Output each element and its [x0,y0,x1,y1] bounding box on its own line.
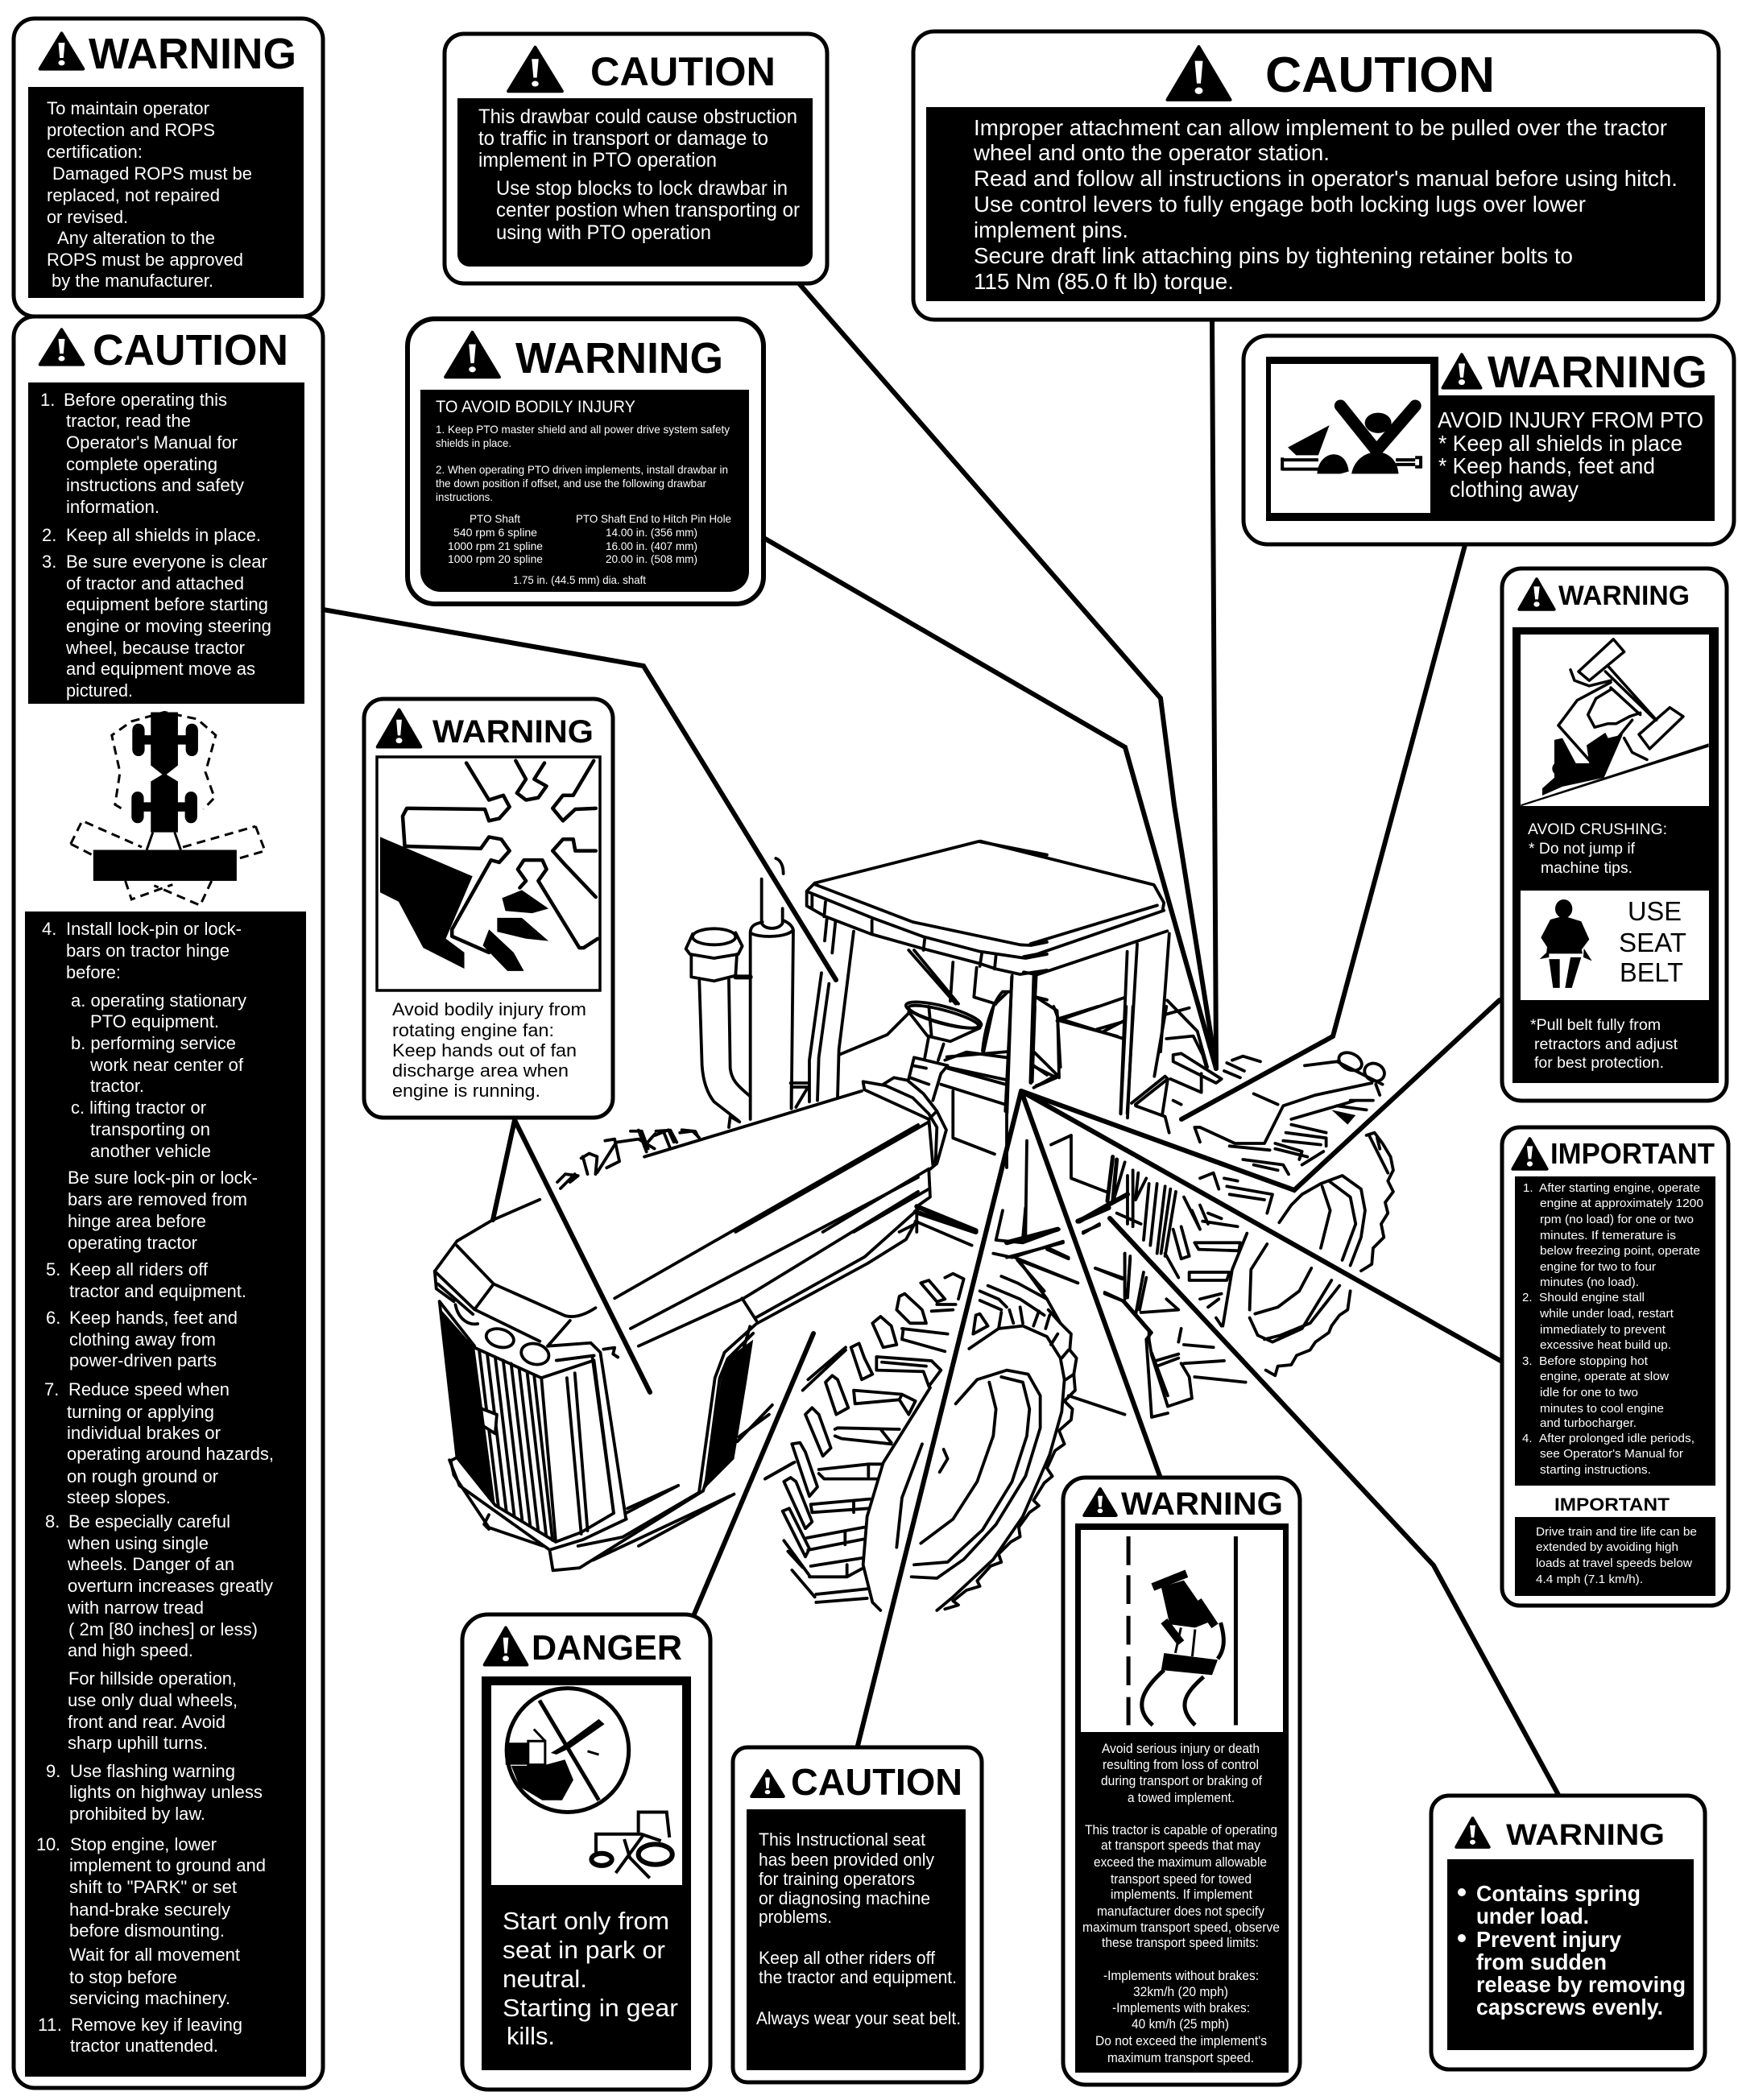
icon: tractor jackknifing on road [1128,1536,1235,1725]
text block [973,115,1678,294]
text block: items 1 to 3: instructions and safety [66,475,244,495]
text block: capscrews evenly. [1476,1995,1663,2019]
icon: seated person with belt [1540,899,1592,988]
text block: items 1 to 3: 2. [42,525,56,545]
text block: items 1 to 3: Keep all shields in place. [66,525,261,545]
icon: warning triangle [445,333,499,377]
text block: Keep all other riders off [759,1948,936,1968]
leader: fan warning left [493,1120,515,1220]
text block: engine instructions: engine for two to four [1540,1260,1656,1274]
text block: center postion when transporting or [496,199,800,221]
icon: warning triangle [1167,47,1231,100]
text block: This drawbar could cause obstruction [478,105,797,128]
text block: items 4 to 11: 7. [44,1379,59,1399]
text block: PTO Shaft End to Hitch Pin Hole [576,512,731,525]
text block: Contains spring [1476,1881,1641,1906]
text block: engine instructions: 4. [1522,1432,1533,1445]
text block: items 4 to 11: transporting on [90,1119,210,1139]
text block: items 4 to 11: For hillside operation, [68,1668,237,1689]
text block [503,1907,678,2050]
text block: items 4 to 11: lights on highway unless [69,1782,263,1802]
text block: items 1 to 3: pictured. [66,680,133,701]
text block: items 4 to 11: Stop engine, lower [70,1834,217,1854]
text block: or diagnosing machine [759,1888,930,1908]
text block: items 4 to 11: 10. [36,1834,60,1854]
panel: PTO bodily injury warning [408,319,763,604]
text block: items 4 to 11: Reduce speed when [68,1379,230,1399]
text block: for training operators [759,1869,915,1889]
text block: engine instructions: 1. [1523,1181,1533,1195]
text block: -Implements with brakes: [1112,2000,1250,2015]
text block: items 4 to 11: before: [66,962,121,982]
text block: items 1 to 3: Be sure everyone is clear [66,552,267,572]
text block: items 4 to 11: servicing machinery. [69,1988,230,2008]
text block: Keep hands out of fan [392,1040,577,1060]
heading: WARNING [89,30,296,78]
text: use seat belt: BELT [1620,957,1683,987]
leader: fan warning right [515,1120,650,1392]
tractor: exhaust, cab and steering wheel [644,841,1047,1232]
icon: warning triangle [1084,1489,1116,1515]
text block: 1.75 in. (44.5 mm) dia. shaft [513,573,646,586]
text block: seat in park or [503,1936,665,1964]
text block: items 4 to 11: front and rear. Avoid [68,1712,226,1732]
heading: WARNING [432,714,594,750]
text block: * Keep hands, feet and [1438,453,1655,478]
heading: CAUTION [791,1761,962,1803]
text block: * Keep all shields in place [1438,431,1682,456]
leader: danger start [693,1333,813,1616]
text block: instructions. [436,490,493,503]
text block: PTO Shaft [470,512,520,525]
tractor: rear fender and rear wheel [1007,1007,1393,1407]
panel: danger start [462,1614,710,2090]
text block: 1000 rpm 21 spline [448,539,543,552]
text block: items 4 to 11: tractor. [90,1076,144,1096]
text block: 1. Keep PTO master shield and all power drive system safety [436,423,730,436]
heading: WARNING [1488,346,1707,397]
text block: implement pins. [974,217,1128,242]
text block: 540 rpm 6 spline [453,526,537,539]
text block: Avoid bodily injury from [392,999,586,1019]
text block: drive train note: 4.4 mph (7.1 km/h). [1536,1573,1643,1586]
text block: at transport speeds that may [1101,1838,1260,1853]
text block: To maintain operator [47,98,209,118]
text block: maximum transport speed, observe [1082,1920,1280,1935]
text block: Any alteration to the [57,228,215,248]
text block: 115 Nm (85.0 ft lb) torque. [974,269,1234,294]
leader: instructional seat caution [858,1091,1021,1746]
text: use seat belt: USE [1628,896,1682,926]
text block: engine instructions: minutes. If temerature is [1540,1229,1676,1242]
text block: these transport speed limits: [1102,1935,1259,1950]
text block: items 4 to 11: use only dual wheels, [68,1690,238,1710]
text block: Improper attachment can allow implement to be pulled over the tractor [974,115,1667,140]
text block: engine instructions [1522,1181,1703,1477]
icon: warning triangle [1443,354,1480,388]
text block: items 4 to 11: 9. [46,1761,60,1781]
text block: items 4 to 11: steep slopes. [67,1487,171,1507]
text block: drive train note [1536,1525,1697,1586]
text block: This Instructional seat [759,1829,925,1850]
text block: items 4 to 11: 11. [38,2015,62,2035]
text block: items 4 to 11: c. lifting tractor or [71,1098,206,1118]
text block: belt instruction [1530,1017,1678,1072]
text block: items 4 to 11: PTO equipment. [90,1011,219,1031]
text block: items 4 to 11: 8. [45,1511,60,1532]
text block: engine instructions: 3. [1522,1354,1533,1368]
text block: a towed implement. [1128,1790,1235,1805]
text block: items 4 to 11: implement to ground and [69,1855,266,1875]
text block: to traffic in transport or damage to [478,127,768,150]
icon: rotating fan and hand [380,761,598,971]
text block: items 4 to 11: bars are removed from [68,1189,247,1209]
text block: This tractor is capable of operating [1085,1822,1277,1838]
icon: warning triangle [1456,1818,1489,1847]
text block: transport speed for towed [1111,1871,1252,1887]
text block: items 4 to 11: Be especially careful [68,1511,230,1532]
text block: items 4 to 11: and high speed. [68,1640,193,1660]
text block: items 1 to 3: engine or moving steering [66,616,271,636]
text block: protection and ROPS [47,120,215,140]
text block: rotating engine fan: [392,1020,554,1040]
text block: items 4 to 11: before dismounting. [69,1920,225,1941]
subheading: IMPORTANT [1554,1494,1670,1515]
text block: kills. [507,2022,555,2050]
text block: items 4 to 11: tractor unattended. [70,2036,218,2056]
text block: items 4 to 11: Wait for all movement [69,1945,240,1965]
text block: items 4 to 11: bars on tractor hinge [66,940,230,961]
text block: items 4 to 11: work near center of [89,1055,244,1075]
text block: drive train note: extended by avoiding high [1536,1540,1678,1554]
text block: 32km/h (20 mph) [1133,1984,1228,1999]
text block: items 4 to 11: with narrow tread [67,1598,204,1618]
text block: engine instructions: idle for one to two [1540,1386,1638,1399]
text block: using with PTO operation [496,221,711,244]
text block: engine instructions: After prolonged idle periods, [1539,1432,1695,1445]
text block: engine instructions: 2. [1522,1291,1533,1304]
text block: wheel and onto the operator station. [973,140,1330,165]
text block: AVOID INJURY FROM PTO [1438,407,1703,432]
text block: items 4 to 11: a. operating stationary [71,990,246,1011]
panel: important notice [1502,1127,1728,1606]
heading: CAUTION [590,49,776,94]
text block: certification: [47,142,143,162]
text block: engine instructions: After starting engine, operate [1539,1181,1700,1195]
text block: avoid crushing: machine tips. [1541,860,1632,877]
text block: items 4 to 11: to stop before [69,1967,177,1987]
text block: items 1 to 3: and equipment move as [66,659,255,679]
panel: transport warning [1063,1478,1300,2085]
text block: items 4 to 11: Keep hands, feet and [69,1308,238,1328]
text block: discharge area when [392,1060,569,1081]
text block: items 1 to 3: information. [66,497,159,517]
text block: Starting in gear [503,1994,678,2022]
leader: drawbar caution [799,283,1216,1069]
text block: avoid crushing: AVOID CRUSHING: [1528,821,1667,838]
text block: items 1 to 3: tractor, read the [66,411,191,431]
icon: person caught in PTO shaft [1282,406,1421,473]
text block: items 1 to 3: wheel, because tractor [65,638,245,658]
leader: hitch caution [1212,320,1216,1069]
text block: during transport or braking of [1101,1773,1262,1788]
text block: belt instruction: retractors and adjust [1534,1036,1678,1053]
text block: the tractor and equipment. [759,1967,957,1987]
panel: fan warning [364,699,613,1118]
text block: avoid crushing: * Do not jump if [1529,841,1636,858]
leader lines from decals to tractor [323,283,1558,1795]
text block: the down position if offset, and use the following drawbar [436,477,706,490]
text block: belt instruction: for best protection. [1534,1055,1664,1072]
text block: items 4 to 11: ( 2m [80 inches] or less) [68,1619,258,1639]
text block: 40 km/h (25 mph) [1132,2016,1229,2032]
text block: items 4 to 11: 5. [46,1259,60,1279]
text block: drive train note: loads at travel speeds below [1536,1556,1692,1570]
text block: neutral. [503,1965,587,1993]
text block: shields in place. [436,436,511,449]
text block: items 4 to 11: hinge area before [68,1211,206,1231]
text block [756,1829,961,2028]
text block: items 4 to 11: individual brakes or [67,1423,221,1443]
text block: items 4 to 11: wheels. Danger of an [67,1554,234,1574]
text block: items 1 to 3: complete operating [66,454,217,474]
text block: engine instructions: see Operator's Manual for [1540,1447,1683,1461]
text block: engine instructions: Before stopping hot [1539,1354,1649,1368]
heading: CAUTION [93,326,288,374]
text block: under load. [1476,1904,1589,1928]
text block: engine instructions: while under load, restart [1539,1307,1674,1321]
text block: engine instructions: minutes (no load). [1540,1275,1639,1289]
icon: warning triangle [40,329,83,365]
text block: items 4 to 11: hand-brake securely [69,1900,230,1920]
text block: items 4 to 11: turning or applying [67,1402,214,1422]
text block: items 1 to 3: Operator's Manual for [66,432,238,453]
text block: has been provided only [759,1850,934,1870]
tractor: hood, grille and bumper [435,1125,918,1546]
tractor: front wheel [765,1208,1168,1610]
text block: release by removing [1476,1972,1686,1997]
heading: DANGER [532,1628,682,1668]
text block: Use stop blocks to lock drawbar in [496,177,788,200]
text block: implements. If implement [1111,1887,1252,1902]
text block: or revised. [47,207,128,227]
panel: instructional seat caution [733,1747,982,2082]
icon: warning triangle [508,48,562,91]
text block: items 4 to 11 [36,919,274,2056]
text block: items 1 to 3: equipment before starting [66,594,268,614]
panel: hitch caution [913,31,1719,320]
text block: avoid crushing [1528,821,1667,877]
text block: items 4 to 11: on rough ground or [67,1466,218,1486]
panel: PTO warning [1243,336,1734,544]
text block: engine is running. [392,1081,540,1101]
text block: items 4 to 11: shift to "PARK" or set [69,1877,237,1897]
icon: warning triangle [1519,579,1554,610]
heading: IMPORTANT [1550,1137,1715,1170]
text block: -Implements without brakes: [1103,1968,1259,1983]
panel: seat belt warning [1502,568,1727,1101]
icon: warning triangle [751,1771,784,1796]
text block: items 1 to 3: Before operating this [64,390,227,410]
tractor illustration [435,841,1393,1610]
text block: items 1 to 3: 3. [42,552,56,572]
heading: CAUTION [1265,48,1495,103]
icon: hinge turning diagram [71,712,265,905]
text block: engine instructions: Should engine stall [1539,1291,1645,1304]
leader: important notice [1021,1091,1502,1362]
text block: drive train note: Drive train and tire life can be [1536,1525,1697,1539]
panel: drawbar caution [445,34,827,283]
leader: transport warning [1021,1091,1160,1476]
panel: spring warning [1431,1796,1705,2069]
text block: implement in PTO operation [478,149,717,172]
heading: WARNING [1558,581,1690,611]
icon: tipping tractor [1521,639,1709,806]
text block: Damaged ROPS must be [52,163,252,184]
text block: exceed the maximum allowable [1094,1854,1267,1870]
text block: Read and follow all instructions in operator's manual before using hitch. [974,166,1678,191]
text block: items 4 to 11: Be sure lock-pin or lock- [68,1168,258,1188]
text block: Start only from [503,1907,669,1935]
text block: manufacturer does not specify [1097,1904,1264,1919]
text block: resulting from loss of control [1103,1757,1259,1772]
text: use seat belt [1619,896,1686,987]
text block: engine instructions: and turbocharger. [1540,1416,1637,1430]
heading: WARNING [1506,1818,1665,1851]
icon: warning triangle [485,1627,527,1665]
leader: ROPS and operating caution [323,610,836,980]
icon: warning triangle [1512,1139,1547,1169]
text block [478,105,800,244]
text block [1458,1881,1686,2019]
text block [392,999,586,1101]
text block [436,398,731,586]
text block: items 4 to 11: operating tractor [68,1233,197,1253]
text block: by the manufacturer. [52,271,213,291]
text block: items 4 to 11: Use flashing warning [70,1761,235,1781]
text block: Avoid serious injury or death [1102,1741,1260,1756]
text block: items 4 to 11: operating around hazards, [67,1444,274,1464]
text block: items 4 to 11: prohibited by law. [69,1804,205,1824]
text block: items 4 to 11: clothing away from [69,1329,216,1350]
text block: Prevent injury [1476,1927,1621,1952]
text block: items 4 to 11: Install lock-pin or lock- [66,919,242,939]
text block: belt instruction: *Pull belt fully from [1530,1017,1661,1034]
text block: 20.00 in. (508 mm) [606,552,697,565]
text block: engine instructions: starting instructions. [1540,1463,1651,1477]
leader: PTO bodily injury warning [765,539,1216,1069]
text block: items 4 to 11: 4. [42,919,56,939]
text block: replaced, not repaired [47,185,220,205]
text block: items 4 to 11: 6. [46,1308,60,1328]
text block: engine instructions: excessive heat build up. [1540,1338,1671,1352]
tractor: lower bumper, roof and right cab posts [449,841,1207,1570]
leader: seat belt warning [1021,1000,1500,1190]
heading: WARNING [515,334,723,382]
text block: engine instructions: below freezing point, operate [1540,1244,1700,1258]
text block: Use control levers to fully engage both locking lugs over lower [974,192,1586,217]
text block: Do not exceed the implement's [1095,2033,1267,2048]
icon: warning triangle [40,33,83,69]
text block [1082,1741,1280,2065]
text block: problems. [759,1907,832,1927]
text block: Secure draft link attaching pins by tightening retainer bolts to [974,243,1573,268]
text block: items 1 to 3 [40,390,271,701]
text block: items 1 to 3: 1. [40,390,55,410]
text block: items 4 to 11: Keep all riders off [69,1259,209,1279]
text block: items 4 to 11: Remove key if leaving [71,2015,242,2035]
text block: TO AVOID BODILY INJURY [436,398,635,416]
text block: maximum transport speed. [1107,2050,1254,2065]
text block: engine instructions: engine, operate at slow [1540,1370,1669,1383]
text block: 16.00 in. (407 mm) [606,539,697,552]
panel: ROPS warning [14,19,323,316]
text block: items 4 to 11: tractor and equipment. [69,1281,246,1301]
text block: Always wear your seat belt. [756,2008,961,2028]
text block: items 4 to 11: when using single [67,1533,209,1553]
panel: operating caution [14,316,323,2088]
text block: engine instructions: engine at approximately 1200 [1540,1197,1703,1210]
text block: ROPS must be approved [47,250,243,270]
text block: clothing away [1450,477,1579,502]
text block: 1000 rpm 20 spline [448,552,543,565]
leader: PTO warning [1181,545,1465,1119]
heading: WARNING [1121,1486,1283,1522]
icon: no shorting starter, tractor [506,1689,672,1878]
text block: items 4 to 11: power-driven parts [69,1350,217,1370]
icon: warning triangle [378,709,420,747]
text block: 2. When operating PTO driven implements, install drawbar in [436,463,728,476]
text block: items 1 to 3: of tractor and attached [66,573,244,593]
text block: items 4 to 11: b. performing service [71,1033,236,1053]
text block: engine instructions: rpm (no load) for one or two [1540,1213,1694,1226]
text block: engine instructions: minutes to cool engine [1540,1402,1664,1416]
text: use seat belt: SEAT [1619,928,1686,957]
text block: from sudden [1476,1949,1607,1974]
text block: 14.00 in. (356 mm) [606,526,697,539]
leader: spring warning [1110,1218,1558,1795]
text block: engine instructions: immediately to prevent [1540,1323,1666,1337]
text block: items 4 to 11: overturn increases greatly [68,1576,273,1596]
text block [1438,407,1703,502]
text block [47,98,252,291]
text block: items 4 to 11: sharp uphill turns. [68,1733,208,1753]
text block: items 4 to 11: another vehicle [90,1141,211,1161]
